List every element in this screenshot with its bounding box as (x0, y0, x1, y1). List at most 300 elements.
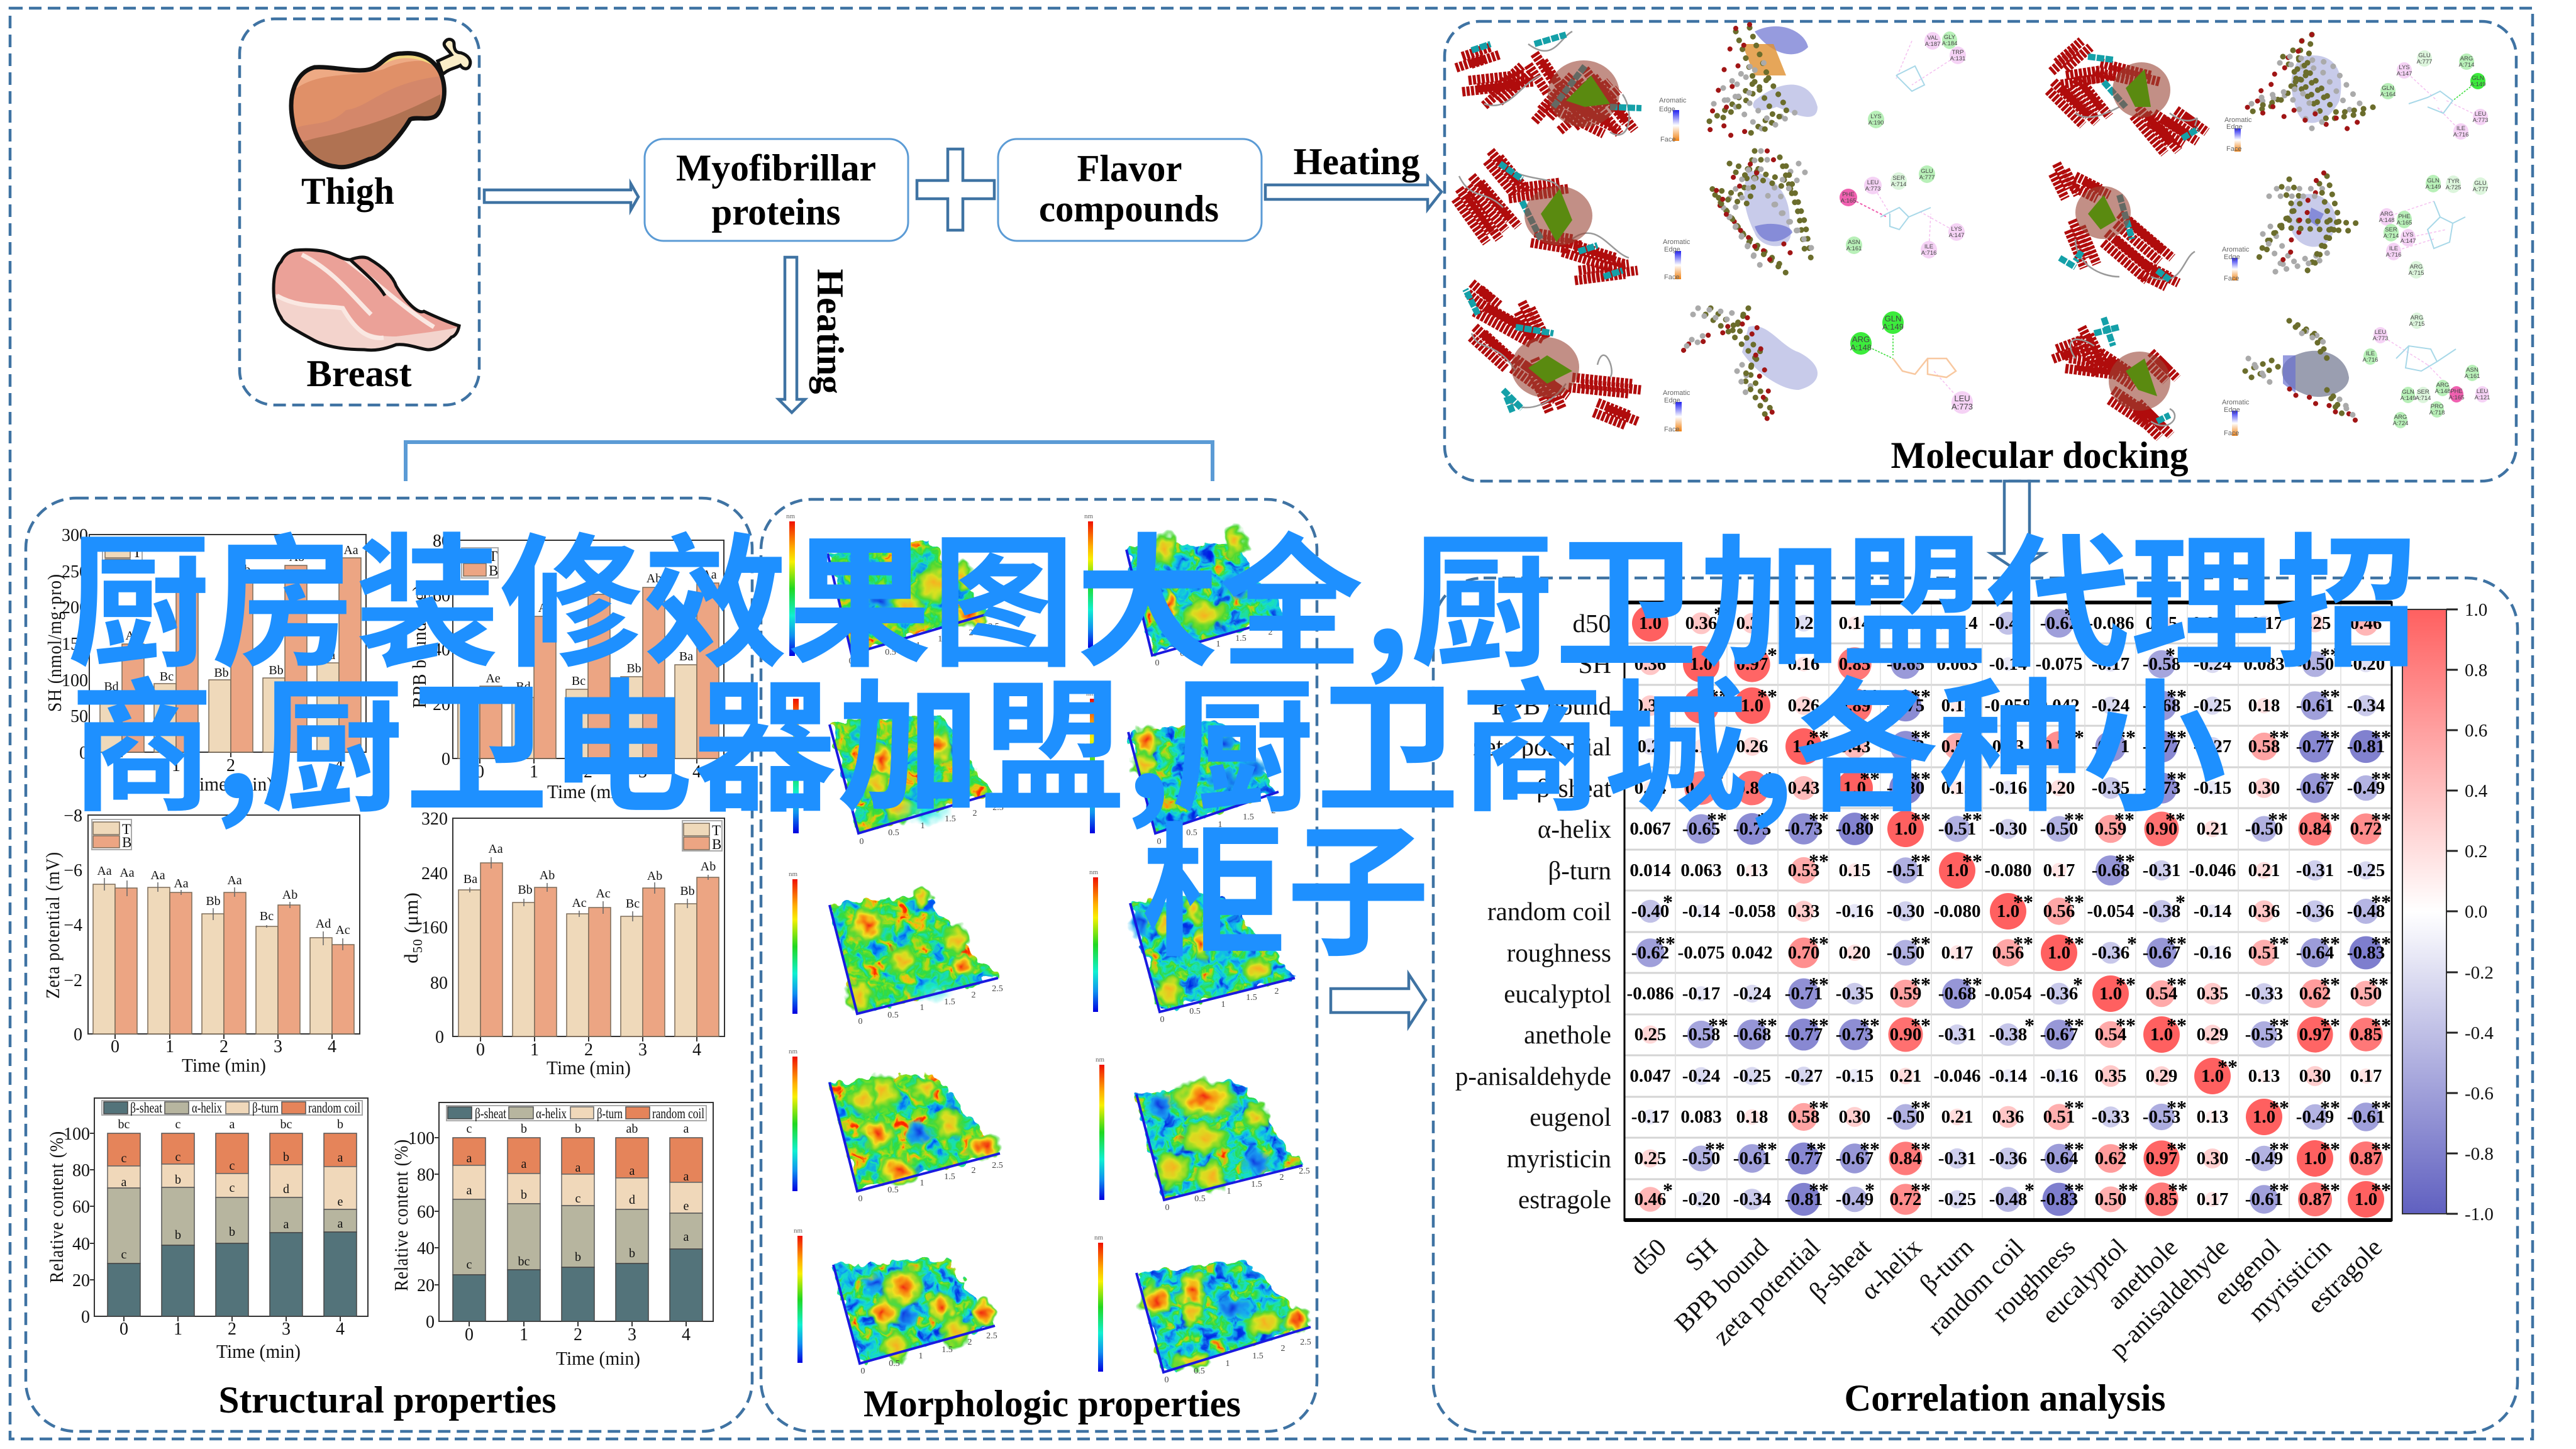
matrix row: alpha-helix: 0.59 (2095, 819, 2126, 839)
matrix row: SH: -0.075 (2036, 654, 2082, 674)
matrix row: random coil: -0.14 (1682, 901, 1720, 921)
matrix row: myristicin: -0.61 (1733, 1148, 1771, 1169)
chart: particle size d50: B (712, 836, 721, 852)
matrix row: SH: ** (2320, 643, 2340, 666)
chart: zeta potential: −6 (64, 861, 82, 880)
matrix row: anethole: ** (1708, 1014, 1728, 1036)
chart: stacked secondary structure T: a (338, 1151, 343, 1165)
docking row 1 right: protein (2048, 41, 2207, 153)
matrix row: SH: * (1714, 643, 1724, 666)
matrix row: eugenol: 0.51 (2043, 1107, 2075, 1127)
title overlay in blue (67, 487, 2418, 985)
chart: SH content: 200 (62, 598, 88, 618)
matrix row: eugenol: ** (2371, 1096, 2391, 1119)
matrix row: beta-sheat: 0.89 (1736, 778, 1768, 798)
heading: Molecular docking: Molecular docking (1890, 435, 2189, 476)
matrix row: alpha-helix: ** (1962, 808, 1982, 831)
residue group: TYR (2448, 178, 2460, 185)
chart: stacked secondary structure B: b (575, 1250, 581, 1264)
residue group: A:725 (2446, 184, 2461, 191)
chart: BPB bound: T (489, 548, 497, 564)
matrix row: anethole: ** (2269, 1014, 2289, 1036)
docking row 2 left: edge legend: Aromatic (1663, 238, 1690, 246)
docking row 3 right: 2D interactions (2363, 313, 2490, 428)
chart: stacked secondary structure B: 0 (465, 1325, 474, 1345)
matrix row: p-anisaldehyde (1629, 1055, 2382, 1094)
matrix row: roughness: 0.70 (1788, 943, 1819, 963)
matrix row: zeta potential: -0.77 (2143, 736, 2180, 757)
matrix row: alpha-helix: ** (1757, 808, 1777, 831)
column labels: eugenol (2207, 1233, 2285, 1311)
residue group: ASN (2466, 367, 2479, 374)
AFM surface row 3 right: 1.5 (1246, 993, 1257, 1002)
matrix row: myristicin: ** (1860, 1138, 1880, 1160)
chart: zeta potential: 4 (328, 1037, 336, 1057)
chart: SH content: Ba (321, 648, 335, 662)
matrix row: zeta potential: -0.77 (2296, 736, 2334, 757)
chart: stacked secondary structure B: 80 (417, 1165, 435, 1185)
AFM surface row 5 left: 2 (967, 1338, 972, 1347)
AFM surface row 2 right (1086, 690, 1279, 847)
matrix row: zeta potential: 0.26 (1736, 736, 1768, 757)
chart: BPB bound: Bb (626, 662, 641, 675)
AFM surface row 4 right: 1 (1226, 1187, 1231, 1196)
chart: particle size d50: T (712, 823, 721, 838)
chart: stacked secondary structure T: 2 (228, 1319, 236, 1339)
AFM surface row 1 left: 0 (849, 657, 853, 666)
chart: stacked secondary structure B: c (467, 1258, 472, 1272)
matrix row: estragole: * (1663, 1179, 1673, 1201)
chart: stacked secondary structure B: 100 (408, 1129, 435, 1148)
chart: zeta potential: 3 (274, 1037, 282, 1057)
label: Breast: Breast (307, 353, 412, 394)
matrix row: alpha-helix: ** (1911, 808, 1931, 831)
matrix row: eugenol: 0.083 (1680, 1107, 1722, 1127)
matrix row: zeta potential: 0.16 (1685, 736, 1717, 757)
matrix row: p-anisaldehyde: 0.21 (1890, 1066, 1921, 1086)
matrix row: roughness: 0.042 (1731, 943, 1773, 963)
matrix row: zeta potential: ** (1809, 726, 1829, 748)
chart: BPB bound: 20 (433, 695, 450, 714)
matrix row: random coil: -0.16 (1836, 901, 1874, 921)
AFM surface row 3 left: 1.5 (944, 997, 955, 1007)
chart: zeta potential: Aa (97, 864, 112, 878)
matrix row: estragole: 0.72 (1890, 1189, 1921, 1209)
matrix row: zeta potential (1631, 726, 2391, 765)
matrix row: alpha-helix: -0.51 (1938, 819, 1976, 839)
colour bar legend: -0.4 (2465, 1023, 2494, 1043)
matrix row: beta-sheat: -0.15 (2194, 778, 2231, 798)
colour bar legend: -0.2 (2465, 963, 2494, 983)
panel: structural properties (26, 498, 752, 1431)
matrix row: alpha-helix: ** (1707, 808, 1727, 831)
chart: stacked secondary structure B: 3 (628, 1325, 636, 1345)
matrix row: zeta potential: ** (2269, 726, 2289, 748)
matrix row: myristicin: ** (1705, 1138, 1725, 1160)
column labels: d50 (1624, 1233, 1672, 1280)
matrix row: roughness: ** (2064, 932, 2084, 955)
chart: BPB bound: Ab (647, 572, 662, 586)
matrix row: zeta potential: 0.33 (1992, 736, 2024, 757)
chart: zeta potential: Ab (282, 888, 297, 902)
matrix row: beta-turn: -0.080 (1985, 860, 2031, 880)
matrix row: SH: ** (1860, 643, 1880, 666)
matrix row: anethole: -0.53 (2245, 1024, 2283, 1045)
AFM surface row 3 right: nm (1089, 869, 1098, 876)
column labels: anethole (2101, 1233, 2183, 1315)
matrix row: eugenol: 0.36 (1992, 1107, 2024, 1127)
residue group: ARG (2380, 211, 2393, 218)
matrix row: eugenol: 0.58 (1788, 1107, 1819, 1127)
matrix row: d50: 0.14 (1839, 613, 1870, 633)
matrix row: roughness: ** (2013, 932, 2033, 955)
residue group: A:716 (2453, 131, 2468, 138)
chart: zeta potential: Time (min) (182, 1054, 266, 1076)
matrix row: beta-sheat: 0.14 (1635, 778, 1666, 798)
AFM surface row 3 left: 1 (919, 1003, 924, 1013)
residue group: A:773 (1865, 186, 1880, 192)
matrix row: alpha-helix: -0.73 (1785, 819, 1823, 839)
chart: BPB bound: Bd (516, 680, 531, 694)
residue group: A:148 (2379, 217, 2394, 224)
matrix row: d50: * (2021, 602, 2031, 625)
residue group (1850, 311, 1973, 414)
panel: correlation analysis (1433, 578, 2518, 1433)
AFM surface row 1 right: 1.5 (1235, 634, 1246, 643)
residue group: LYS (1870, 113, 1882, 120)
matrix row: roughness (1631, 932, 2391, 971)
matrix row: roughness: ** (1655, 932, 1675, 955)
chart: particle size d50: 2 (584, 1040, 593, 1060)
row labels: myristicin (1507, 1144, 1611, 1173)
matrix row: beta-turn: 0.17 (2043, 860, 2075, 880)
matrix row: beta-sheat: * (1765, 767, 1775, 790)
matrix row: d50: * (1663, 602, 1673, 625)
matrix row: d50: 0.25 (2146, 613, 2177, 633)
colour bar legend: -0.6 (2465, 1084, 2494, 1104)
residue group: ASN (1848, 239, 1860, 246)
AFM surface row 1 left: 1 (916, 641, 921, 650)
AFM surface row 4 right: 0.5 (1194, 1194, 1206, 1204)
matrix row: eucalyptol: 0.50 (2350, 984, 2382, 1004)
docking row 3 left: edge legend: Face (1664, 426, 1679, 433)
docking row 1 left: edge legend: Aromatic (1659, 97, 1687, 104)
matrix row: anethole: ** (2116, 1014, 2136, 1036)
matrix row: p-anisaldehyde: ** (2218, 1055, 2238, 1078)
docking row 1 left: edge legend: Face (1660, 136, 1675, 143)
matrix row: beta-sheat: ** (2371, 767, 2391, 790)
chart: zeta potential: Aa (174, 877, 189, 891)
AFM surface row 1 right: 0.5 (1180, 649, 1191, 658)
AFM surface row 2 right: nm (1086, 690, 1096, 697)
matrix row: beta-sheat: 0.15 (1941, 778, 1973, 798)
matrix row: zeta potential: 0.58 (2248, 736, 2280, 757)
matrix row: zeta potential: 0.70 (2043, 736, 2075, 757)
matrix row: anethole: -0.38 (1989, 1024, 2027, 1045)
row labels: zeta potential (1473, 732, 1611, 761)
matrix row: roughness: -0.64 (2296, 943, 2334, 963)
docking row 3 right: edge legend (2222, 399, 2250, 437)
docking row 2 right: edge legend: Edge (2224, 253, 2240, 261)
icon: plus sign (917, 149, 994, 230)
residue group: LYS (2402, 231, 2414, 238)
matrix row: myristicin: ** (1806, 1138, 1826, 1160)
matrix row: random coil: ** (2013, 891, 2033, 913)
column labels: SH (1679, 1233, 1723, 1276)
matrix row: estragole: * (2024, 1179, 2035, 1201)
matrix row: SH: 0.85 (1839, 654, 1870, 674)
matrix row: estragole: -0.48 (1989, 1189, 2027, 1209)
chart: particle size d50: 1 (530, 1040, 539, 1060)
column labels: random coil (1922, 1233, 2029, 1341)
chart: stacked secondary structure B: c (467, 1122, 472, 1136)
AFM surface row 1 left: nm (786, 513, 795, 520)
chart: SH content: Time (min) (189, 773, 273, 795)
matrix row: eucalyptol: * (2073, 973, 2083, 996)
label: Heating (vertical): Heating (809, 269, 851, 394)
residue group: A:165 (2397, 219, 2412, 226)
chart: stacked secondary structure B: β-turn (597, 1106, 623, 1121)
matrix row: roughness: ** (2371, 932, 2391, 955)
chart: SH content: B (133, 557, 142, 573)
docking row 2 right: edge legend (2222, 246, 2250, 282)
column labels: eucalyptol (2036, 1233, 2132, 1329)
chart: stacked secondary structure T: e (338, 1195, 343, 1209)
chart: SH content: Ac (125, 629, 140, 643)
matrix row: d50: -0.17 (2245, 613, 2283, 633)
docking row 2 left: ligand surface (1711, 151, 1811, 273)
matrix row: myristicin: 0.87 (2350, 1148, 2382, 1169)
matrix row: alpha-helix: 0.21 (2197, 819, 2228, 839)
chart: stacked secondary structure T: 80 (72, 1161, 90, 1180)
docking row 2 left: edge legend: Edge (1664, 246, 1680, 253)
residue group: PHE (1842, 191, 1855, 198)
residue group: ARG (2410, 264, 2423, 270)
AFM surface row 3 right (1089, 869, 1295, 1024)
chart: BPB bound (408, 531, 724, 802)
residue group: A:773 (2373, 335, 2388, 342)
matrix row: random coil: * (1663, 891, 1673, 913)
residue group: A:149 (2401, 395, 2416, 402)
residue group: A:149 (1882, 322, 1904, 331)
chart: stacked secondary structure B: b (629, 1246, 635, 1260)
matrix row: anethole: * (2024, 1014, 2035, 1036)
matrix row: eucalyptol: ** (1809, 973, 1829, 996)
matrix row: beta-sheat (1635, 767, 2391, 806)
matrix row: random coil: 0.36 (2248, 901, 2280, 921)
matrix row: alpha-helix: ** (2371, 808, 2391, 831)
residue group: A:131 (1950, 55, 1965, 62)
AFM surface row 5 left: nm (794, 1227, 802, 1235)
heading: Correlation analysis: Correlation analysis (1844, 1377, 2166, 1419)
residue group: TRP (1952, 49, 1963, 56)
matrix row: anethole (1635, 1014, 2391, 1053)
matrix row: beta-sheat: ** (2167, 767, 2187, 790)
matrix row: d50: ** (2064, 602, 2084, 625)
AFM surface row 5 left (794, 1227, 997, 1376)
matrix row: p-anisaldehyde: -0.15 (1836, 1066, 1874, 1086)
matrix row: beta-turn: -0.31 (2296, 860, 2334, 880)
matrix row: d50: 0.067 (1885, 613, 1926, 633)
residue group: LYS (2399, 64, 2410, 71)
matrix row: SH: 0.063 (1936, 654, 1978, 674)
matrix row: anethole: 1.0 (2150, 1024, 2173, 1045)
matrix row: random coil: 0.56 (2043, 901, 2075, 921)
matrix row: anethole: ** (2320, 1014, 2340, 1036)
AFM surface row 4 right: 2.5 (1299, 1167, 1310, 1176)
matrix row: SH: 0.083 (2243, 654, 2285, 674)
row labels: roughness (1507, 938, 1611, 967)
matrix row: myristicin: ** (1757, 1138, 1777, 1160)
matrix row: alpha-helix: ** (2064, 808, 2084, 831)
matrix row: estragole: ** (2168, 1179, 2188, 1201)
matrix row: beta-turn: ** (2115, 850, 2135, 872)
chart: stacked secondary structure T: 0 (119, 1319, 128, 1339)
chart: stacked secondary structure T: c (230, 1181, 235, 1195)
docking row 1 left: protein (1456, 31, 1641, 135)
chart: stacked secondary structure B: a (684, 1230, 689, 1244)
AFM surface row 1 right: nm (1084, 513, 1093, 520)
chart: SH content: 50 (70, 707, 88, 726)
box: Myofibrillar proteins: Myofibrillar (676, 147, 876, 189)
AFM surface row 4 left: 2 (971, 1166, 976, 1175)
docking row 2 right: edge legend: Face (2224, 275, 2239, 282)
matrix row: alpha-helix: ** (2114, 808, 2135, 831)
matrix row: BPB bound: -0.61 (2296, 696, 2334, 716)
matrix row: p-anisaldehyde: -0.14 (1989, 1066, 2027, 1086)
docking row 1 right: ligand surface (2245, 35, 2375, 132)
chart: stacked secondary structure B: a (684, 1122, 689, 1136)
matrix row: BPB bound: -0.34 (2347, 696, 2385, 716)
AFM surface row 4 left: nm (789, 1048, 797, 1055)
colour bar legend: 0.6 (2465, 721, 2487, 741)
matrix row: myristicin: 0.84 (1890, 1148, 1921, 1169)
residue group: VAL (1927, 35, 1938, 42)
residue group: GLY (1944, 34, 1956, 41)
matrix row: alpha-helix: 0.84 (2299, 819, 2331, 839)
column labels: β-sheat (1803, 1232, 1877, 1306)
chart: stacked secondary structure B: 0 (426, 1313, 435, 1332)
matrix row: estragole: -0.83 (2040, 1189, 2078, 1209)
AFM surface row 5 right: 2 (1280, 1344, 1285, 1353)
row labels: eucalyptol (1504, 979, 1611, 1008)
matrix row: beta-turn: 0.063 (1680, 860, 1722, 880)
chart: particle size d50: 50 (410, 938, 425, 953)
column labels: α-helix (1855, 1233, 1927, 1305)
docking row 2 right: protein (2053, 164, 2195, 287)
matrix row: alpha-helix: ** (1809, 808, 1829, 831)
chart: zeta potential: Bb (206, 894, 221, 908)
arrow: morphology to correlation (1331, 974, 1426, 1026)
matrix row: alpha-helix: -0.80 (1836, 819, 1874, 839)
chart: particle size d50: 80 (430, 974, 448, 993)
docking row 3 left: edge legend: Edge (1664, 397, 1680, 404)
matrix row: eucalyptol: ** (1962, 973, 1982, 996)
AFM surface row 3 left: 2 (971, 991, 976, 1000)
docking row 1 right: 2D interactions (2380, 50, 2488, 140)
docking row 1 left: edge legend: Edge (1659, 106, 1675, 113)
matrix row: random coil: -0.30 (1887, 901, 1924, 921)
chart: SH content: 3 (280, 756, 289, 775)
matrix row: BPB bound: 0.042 (2038, 696, 2080, 716)
AFM surface row 4 left: 1 (919, 1179, 924, 1188)
chart: stacked secondary structure T: b (175, 1173, 181, 1187)
row labels: d50 (1572, 609, 1611, 638)
matrix row: eucalyptol: -0.35 (1836, 984, 1874, 1004)
matrix row: myristicin (1635, 1138, 2391, 1177)
chart: BPB bound: Ac (593, 579, 608, 593)
matrix row: eucalyptol: ** (2116, 973, 2136, 996)
AFM surface row 3 right: 0.5 (1189, 1007, 1201, 1016)
docking row 3 right: protein (2053, 318, 2177, 438)
residue group: A:724 (2393, 420, 2408, 427)
matrix row: eugenol: ** (2269, 1096, 2289, 1119)
colour bar legend: -1.0 (2465, 1204, 2494, 1224)
chart: stacked secondary structure T: a (338, 1217, 343, 1231)
matrix row: random coil: -0.36 (2296, 901, 2334, 921)
matrix row: beta-turn: ** (1809, 850, 1829, 872)
matrix row: eugenol: 0.13 (2197, 1107, 2228, 1127)
residue group: A:121 (2475, 394, 2490, 401)
chart: stacked secondary structure B: 40 (417, 1239, 435, 1258)
residue group: LEU (1867, 179, 1879, 186)
chart: particle size d50: Ac (596, 887, 611, 901)
matrix row: estragole: -0.81 (1785, 1189, 1823, 1209)
chart: BPB bound: 1 (530, 762, 538, 782)
chart: particle size d50: 0 (435, 1028, 444, 1047)
residue group: A:164 (2380, 91, 2396, 98)
matrix row: SH: 0.36 (1635, 654, 1666, 674)
docking row 3 left: 2D interactions (1850, 311, 1973, 414)
matrix row: estragole: -0.20 (1682, 1189, 1720, 1209)
matrix row: myristicin: -0.77 (1785, 1148, 1823, 1169)
matrix row: zeta potential: ** (2167, 726, 2187, 748)
matrix row: roughness: ** (2269, 932, 2289, 955)
matrix row: beta-turn: -0.68 (2092, 860, 2129, 880)
matrix row: beta-turn: -0.51 (1887, 860, 1924, 880)
column labels: roughness (1986, 1233, 2080, 1327)
matrix row: d50: * (2379, 602, 2389, 625)
chart: BPB bound: Ba (679, 650, 693, 663)
chart: SH content: Ab (180, 576, 195, 590)
chart: stacked secondary structure B: 2 (574, 1325, 582, 1345)
matrix row: eucalyptol: -0.17 (1682, 984, 1720, 1004)
matrix row: estragole: -0.49 (1836, 1189, 1874, 1209)
chart: zeta potential: 1 (165, 1037, 174, 1057)
matrix row: eucalyptol: -0.24 (1733, 984, 1771, 1004)
matrix row: alpha-helix: -0.75 (1733, 819, 1771, 839)
matrix row: anethole: 0.54 (2095, 1024, 2126, 1045)
AFM surface row 4 left: 2.5 (992, 1161, 1003, 1170)
chart: stacked secondary structure T: Relative content (%) (45, 1131, 67, 1283)
matrix row: SH: -0.24 (2194, 654, 2231, 674)
chart: stacked secondary structure B: 20 (417, 1276, 435, 1296)
matrix row: zeta potential: ** (1962, 726, 1982, 748)
chart: BPB bound: 40 (433, 640, 450, 660)
AFM surface row 1 right: 0 (1155, 658, 1160, 668)
colour bar legend: 0.0 (2465, 902, 2487, 922)
chart: zeta potential: Zeta potential (mV) (42, 852, 64, 999)
residue group: PHE (2398, 213, 2411, 220)
chart: stacked secondary structure T: c (121, 1248, 127, 1262)
matrix row: beta-turn: 0.13 (1736, 860, 1768, 880)
matrix row: eucalyptol: 0.54 (2146, 984, 2177, 1004)
matrix row: p-anisaldehyde: -0.16 (2040, 1066, 2078, 1086)
AFM surface row 2 right: 1 (1218, 820, 1223, 830)
docking row 3 left: ligand surface (1684, 308, 1818, 426)
chart: particle size d50: 4 (692, 1040, 701, 1060)
chart: stacked secondary structure T: 1 (174, 1319, 182, 1339)
